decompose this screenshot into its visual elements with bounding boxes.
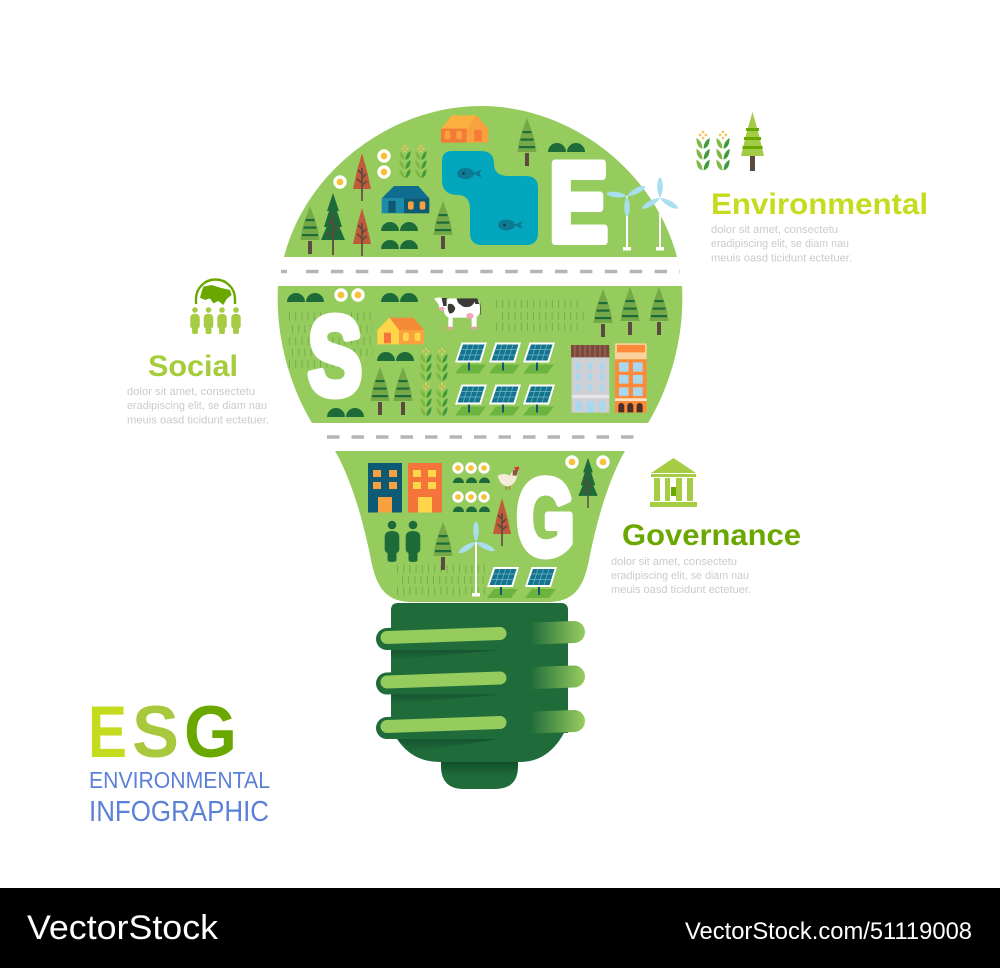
subtitle xyxy=(89,767,270,828)
trees xyxy=(370,287,668,415)
wind turbine xyxy=(457,522,496,596)
base cap xyxy=(441,762,518,789)
flowers and bushes xyxy=(452,455,610,512)
icon: environmental corn and tree xyxy=(696,112,764,171)
grass ticks xyxy=(397,569,487,591)
panel: governance neck xyxy=(335,451,625,602)
heading: Governance: Governance xyxy=(622,519,801,552)
trees xyxy=(300,118,536,256)
footer url: VectorStock.com/51119008 xyxy=(685,918,972,945)
title: ESG: E xyxy=(88,692,127,773)
heading: Environmental: Environmental xyxy=(711,188,928,221)
grass ticks xyxy=(289,304,587,364)
flowers xyxy=(334,288,365,302)
bushes xyxy=(381,143,585,249)
solar panels xyxy=(455,342,555,416)
text block: governance description: meuis oasd ticidunt ectetuer. xyxy=(611,584,751,596)
subtitle: INFOGRAPHIC xyxy=(89,796,269,828)
icon: cow xyxy=(434,297,481,329)
icon: blue office xyxy=(368,463,402,512)
icon: governance building xyxy=(650,458,697,507)
text block: social description xyxy=(127,386,269,426)
letter G: G xyxy=(516,456,574,578)
footer bar xyxy=(0,888,1000,968)
text block: social description: eradipiscing elit, se diam nau xyxy=(127,400,267,412)
icon: orange house xyxy=(441,115,488,143)
flowers xyxy=(333,149,391,189)
corn xyxy=(400,145,426,178)
icon: grey building xyxy=(571,345,609,413)
trees xyxy=(434,458,598,570)
panel: environmental dome xyxy=(284,106,679,265)
icon: blue house xyxy=(382,186,429,213)
text block: governance description: eradipiscing elit, se diam nau xyxy=(611,570,749,582)
solar panels xyxy=(487,567,557,598)
text block: environmental description: eradipiscing elit, se diam nau xyxy=(711,238,849,250)
pond xyxy=(442,151,538,245)
bushes xyxy=(287,293,418,417)
text block: governance description: dolor sit amet, consectetu xyxy=(611,556,737,568)
thread 3 xyxy=(387,721,574,728)
title: ESG: G xyxy=(184,692,237,773)
subtitle: ENVIRONMENTAL xyxy=(89,767,270,793)
people xyxy=(385,521,420,562)
icon: orange building xyxy=(615,343,647,413)
title: ESG xyxy=(88,692,237,773)
text block: social description: meuis oasd ticidunt ectetuer. xyxy=(127,414,269,426)
road lower xyxy=(327,435,634,439)
panel: social middle band xyxy=(278,286,682,423)
thread 1 xyxy=(387,632,574,639)
wind turbines xyxy=(606,178,679,250)
title: ESG: S xyxy=(132,692,179,773)
text block: environmental description xyxy=(711,224,852,264)
letter E: E xyxy=(549,140,608,265)
heading: Social: Social xyxy=(148,350,238,383)
text block: social description: dolor sit amet, consectetu xyxy=(127,386,255,398)
footer brand: VectorStock xyxy=(27,909,219,947)
text block: governance description xyxy=(611,556,751,596)
bulb screw base xyxy=(387,603,574,789)
fish xyxy=(457,168,522,230)
text block: environmental description: dolor sit amet, consectetu xyxy=(711,224,838,236)
icon: social globe and people xyxy=(190,280,241,334)
corn xyxy=(420,348,448,416)
text block: environmental description: meuis oasd ticidunt ectetuer. xyxy=(711,252,852,264)
letter S: S xyxy=(308,294,362,418)
icon: yellow house xyxy=(377,318,424,344)
bulb illustration xyxy=(278,106,682,789)
icon: hen xyxy=(498,466,519,490)
icon: orange office xyxy=(408,463,442,512)
thread shadows xyxy=(391,650,500,752)
road top xyxy=(281,270,680,273)
thread 2 xyxy=(387,676,574,684)
